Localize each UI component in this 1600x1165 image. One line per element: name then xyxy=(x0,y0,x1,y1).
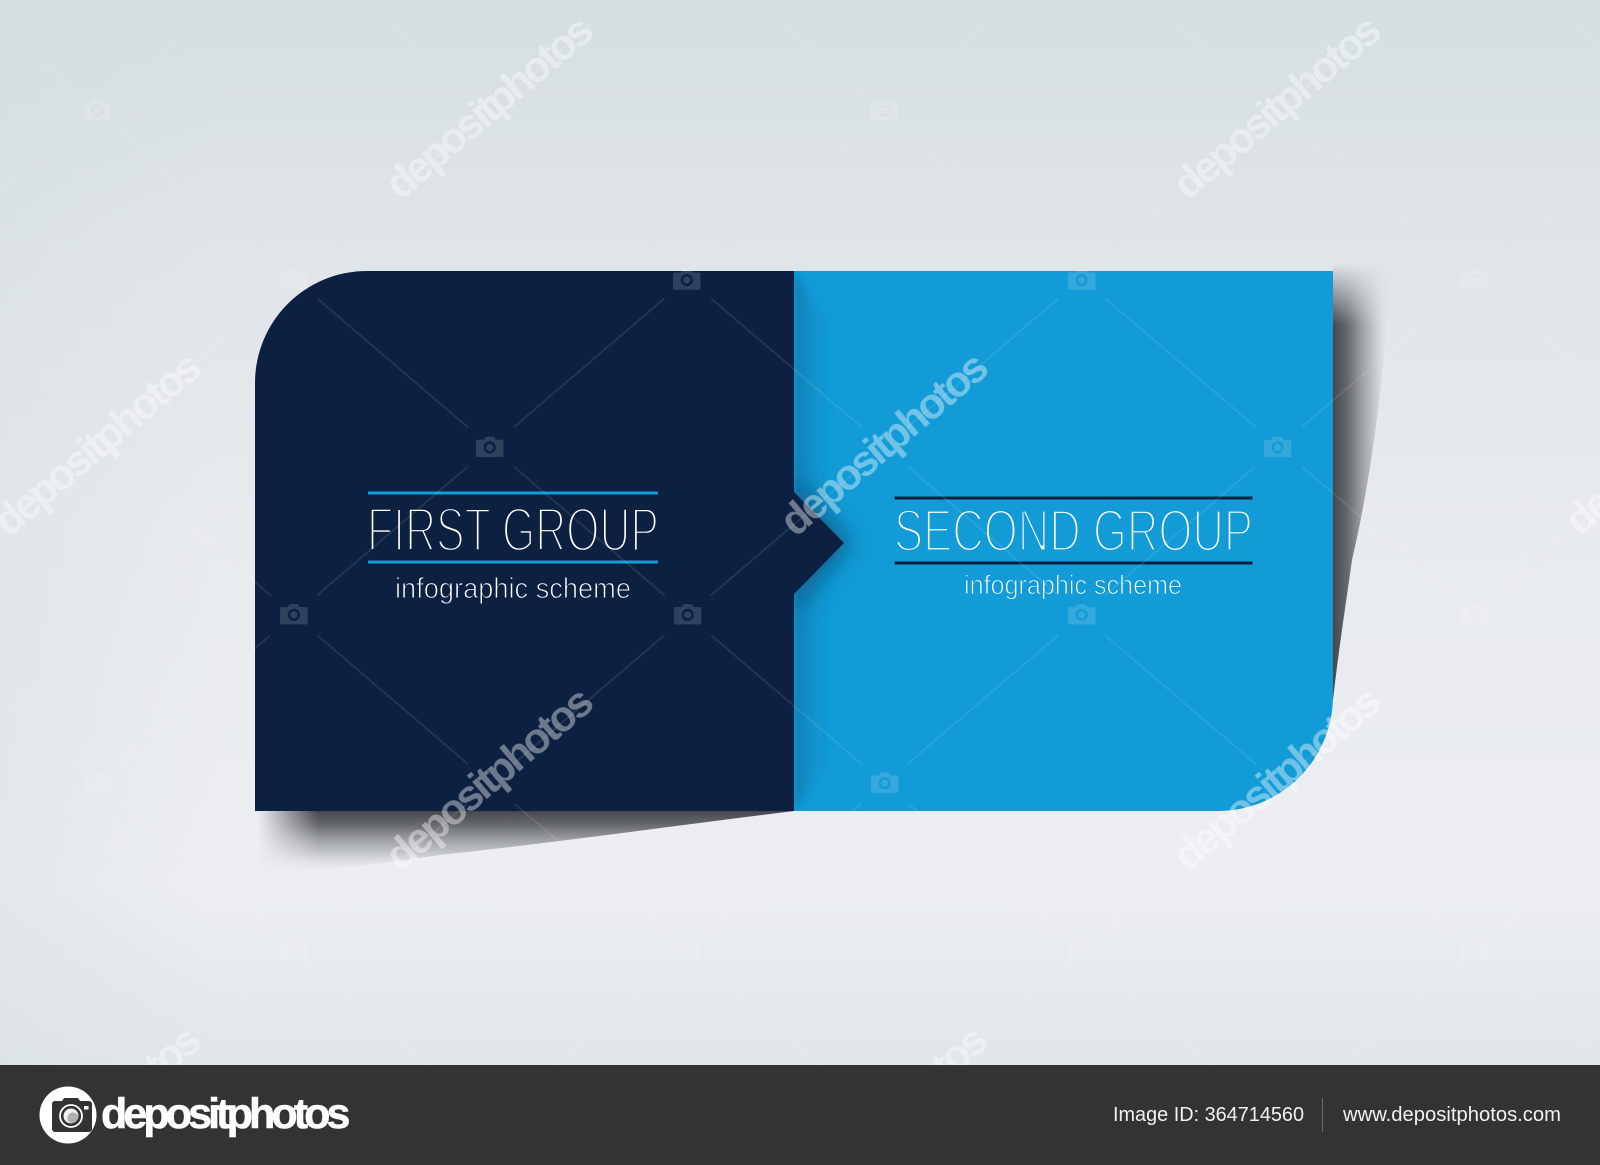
footer divider xyxy=(1322,1098,1323,1132)
watermark wordmarks: tos xyxy=(135,1016,209,1089)
shadow: right side of the card xyxy=(1333,267,1382,700)
panel: second group xyxy=(794,271,1333,811)
watermark wordmarks: depositphotos xyxy=(376,677,602,880)
navy panel shape with arrow xyxy=(255,271,844,811)
watermark wordmarks: tos xyxy=(922,1016,996,1089)
watermark wordmarks: depositphotos xyxy=(376,6,602,209)
first group rule top xyxy=(368,492,658,494)
first group rule bottom xyxy=(368,560,658,564)
second group rule top xyxy=(894,496,1252,500)
panel: first group xyxy=(255,271,844,811)
first group title: FIRST GROUP xyxy=(367,496,659,565)
shadow: bottom of the card xyxy=(260,811,794,866)
logo wordmark: depositphotos xyxy=(101,1090,349,1138)
icon: depositphotos camera logo xyxy=(40,1086,96,1144)
second group title: SECOND GROUP xyxy=(894,498,1253,564)
watermark wordmarks: depositphotos xyxy=(1163,677,1390,880)
blue panel shape xyxy=(794,271,1333,811)
website url: www.depositphotos.com xyxy=(1342,1104,1561,1126)
second group rule bottom xyxy=(894,562,1252,564)
footer background xyxy=(0,1065,1600,1165)
second group subtitle: infographic scheme xyxy=(964,570,1182,600)
footer bar xyxy=(0,1065,1600,1165)
first group subtitle: infographic scheme xyxy=(395,573,631,605)
watermark wordmarks: depositphotos xyxy=(771,343,997,545)
watermark camera icons xyxy=(83,100,1488,961)
fold shading xyxy=(794,271,852,811)
image id: Image ID: 364714560 xyxy=(1113,1104,1304,1126)
watermark wordmarks: depositphotos xyxy=(1163,6,1390,209)
